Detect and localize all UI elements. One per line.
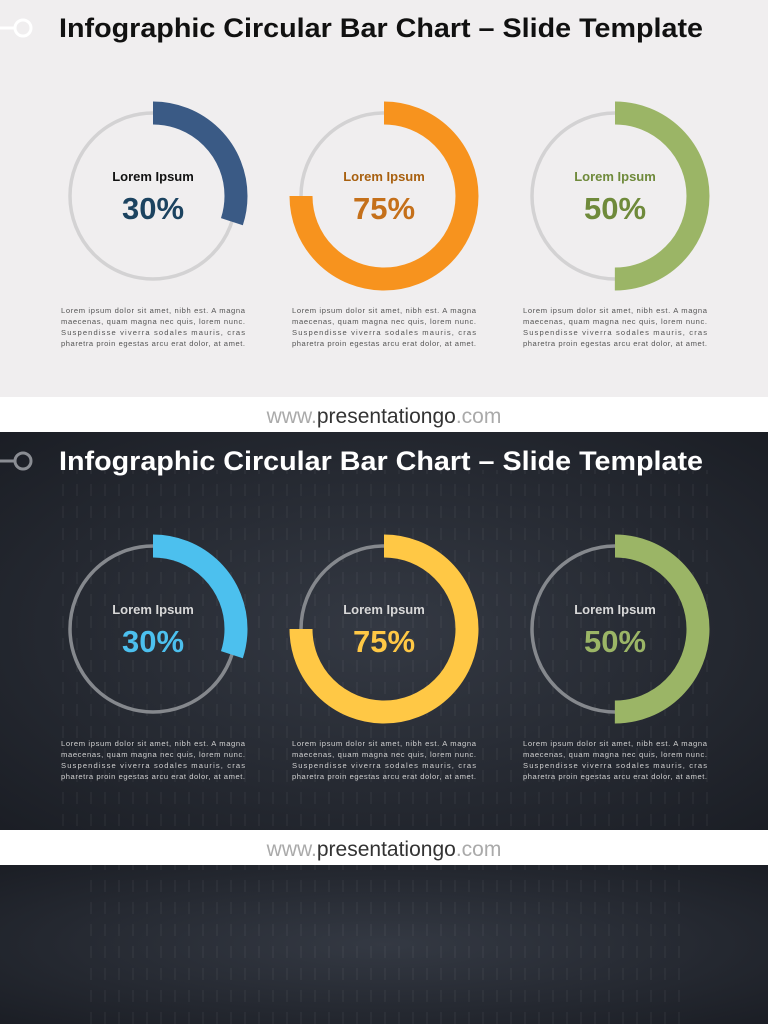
text blocks: pharetra proin egestas arcu erat dolor, at amet. <box>523 772 707 781</box>
text blocks: Suspendisse viverra sodales mauris, cras <box>523 761 707 770</box>
chart: 50% <box>532 113 698 279</box>
chart: 30% <box>70 113 236 279</box>
text blocks: Lorem ipsum dolor sit amet, nibh est. A magna <box>61 739 246 748</box>
chart: 30% <box>70 546 236 712</box>
text blocks: Suspendisse viverra sodales mauris, cras <box>292 761 476 770</box>
chart: 50%: 50% <box>584 191 646 226</box>
panel: dark background continuation <box>0 865 768 1024</box>
chart: 30%: Lorem Ipsum <box>112 602 194 617</box>
chart: 75%: Lorem Ipsum <box>343 602 425 617</box>
chart: 30%: Lorem Ipsum <box>112 169 194 184</box>
text blocks: Lorem ipsum dolor sit amet, nibh est. A magna <box>523 306 708 315</box>
title: Infographic Circular Bar Chart – Slide Template <box>59 13 703 43</box>
chart: 50% <box>532 546 698 712</box>
footer: website 1: www.presentationgo.com <box>266 405 501 428</box>
text blocks: Lorem ipsum dolor sit amet, nibh est. A magna <box>61 306 246 315</box>
text blocks: maecenas, quam magna nec quis, lorem nunc. <box>292 317 476 326</box>
text blocks: Suspendisse viverra sodales mauris, cras <box>292 328 476 337</box>
panel: dark slide <box>0 432 768 830</box>
text blocks: Lorem ipsum dolor sit amet, nibh est. A magna <box>292 739 477 748</box>
text blocks <box>61 739 708 781</box>
text blocks: maecenas, quam magna nec quis, lorem nunc. <box>292 750 476 759</box>
title: Infographic Circular Bar Chart – Slide Template <box>59 446 703 476</box>
chart: 30%: 30% <box>122 191 184 226</box>
text blocks: maecenas, quam magna nec quis, lorem nunc. <box>61 317 245 326</box>
text blocks: Lorem ipsum dolor sit amet, nibh est. A magna <box>292 306 477 315</box>
chart: 75% <box>301 113 467 279</box>
footer: website 2: www.presentationgo.com <box>266 838 501 861</box>
text blocks: Suspendisse viverra sodales mauris, cras <box>61 328 245 337</box>
chart: 30%: 30% <box>122 624 184 659</box>
chart: 75% <box>301 546 467 712</box>
panel: light slide <box>0 0 768 397</box>
chart: 75%: 75% <box>353 191 415 226</box>
chart: 75%: Lorem Ipsum <box>343 169 425 184</box>
text blocks: pharetra proin egestas arcu erat dolor, at amet. <box>61 339 245 348</box>
text blocks: pharetra proin egestas arcu erat dolor, at amet. <box>292 772 476 781</box>
chart: 50%: Lorem Ipsum <box>574 602 656 617</box>
chart: 50%: 50% <box>584 624 646 659</box>
text blocks: maecenas, quam magna nec quis, lorem nunc. <box>61 750 245 759</box>
icon: title connector <box>0 453 31 469</box>
text blocks: pharetra proin egestas arcu erat dolor, at amet. <box>61 772 245 781</box>
chart: 50%: Lorem Ipsum <box>574 169 656 184</box>
chart: 75%: 75% <box>353 624 415 659</box>
text blocks: maecenas, quam magna nec quis, lorem nunc. <box>523 750 707 759</box>
text blocks: pharetra proin egestas arcu erat dolor, at amet. <box>523 339 707 348</box>
text blocks <box>61 306 708 348</box>
icon: title connector <box>0 20 31 36</box>
text blocks: Lorem ipsum dolor sit amet, nibh est. A magna <box>523 739 708 748</box>
text blocks: Suspendisse viverra sodales mauris, cras <box>523 328 707 337</box>
text blocks: pharetra proin egestas arcu erat dolor, at amet. <box>292 339 476 348</box>
text blocks: maecenas, quam magna nec quis, lorem nunc. <box>523 317 707 326</box>
text blocks: Suspendisse viverra sodales mauris, cras <box>61 761 245 770</box>
